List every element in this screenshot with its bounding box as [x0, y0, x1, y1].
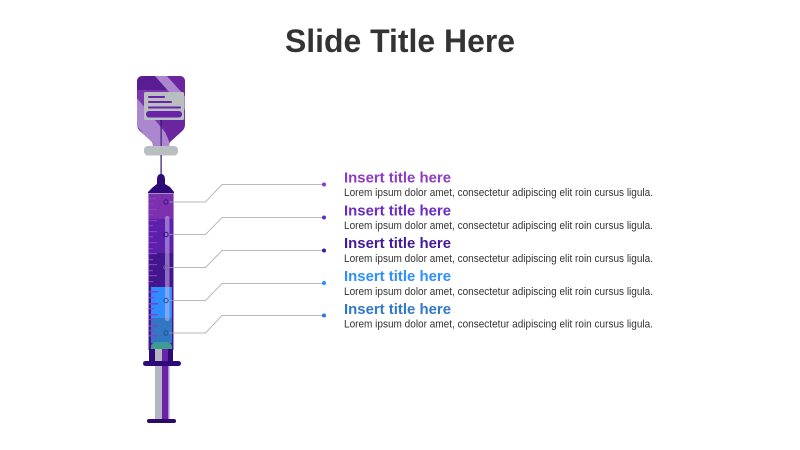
scale ticks [149, 198, 158, 336]
text block 2: Lorem ipsum dolor amet, consectetur adipiscing elit roin cursus ligula. [344, 220, 653, 232]
vial body [137, 76, 185, 148]
barrel [148, 193, 174, 350]
text block 4: Lorem ipsum dolor amet, consectetur adipiscing elit roin cursus ligula. [344, 286, 653, 298]
text block 3: Lorem ipsum dolor amet, consectetur adipiscing elit roin cursus ligula. [344, 253, 653, 265]
text block 1: Insert title here [344, 170, 451, 186]
connector 1 [164, 182, 326, 204]
syringe tip [148, 174, 174, 194]
text block 1: Lorem ipsum dolor amet, consectetur adipiscing elit roin cursus ligula. [344, 187, 653, 199]
text block 5: Insert title here [344, 302, 451, 318]
title: Slide Title Here [285, 23, 515, 59]
vial label [144, 92, 184, 120]
connector 4 [164, 281, 326, 303]
barrel highlight [165, 216, 170, 321]
vial cap [144, 146, 178, 156]
connector 5 [164, 314, 326, 335]
barrel base [143, 349, 181, 366]
plunger rod [147, 345, 176, 423]
text block 4 [344, 269, 653, 298]
text block 2: Insert title here [344, 204, 451, 220]
connector 2 [164, 216, 326, 237]
needle below cap [161, 155, 162, 176]
text block 3 [344, 236, 653, 265]
text block 3: Insert title here [344, 236, 451, 252]
liquid segments [149, 194, 173, 349]
text block 5: Lorem ipsum dolor amet, consectetur adipiscing elit roin cursus ligula. [344, 318, 653, 330]
text block 2 [344, 204, 653, 232]
icon: medicine vial [137, 76, 185, 176]
connector 3 [164, 248, 326, 270]
vial needle [161, 120, 162, 176]
text block 5 [344, 302, 653, 330]
icon: syringe [143, 174, 181, 423]
text block 1 [344, 170, 653, 199]
text block 4: Insert title here [344, 269, 451, 285]
